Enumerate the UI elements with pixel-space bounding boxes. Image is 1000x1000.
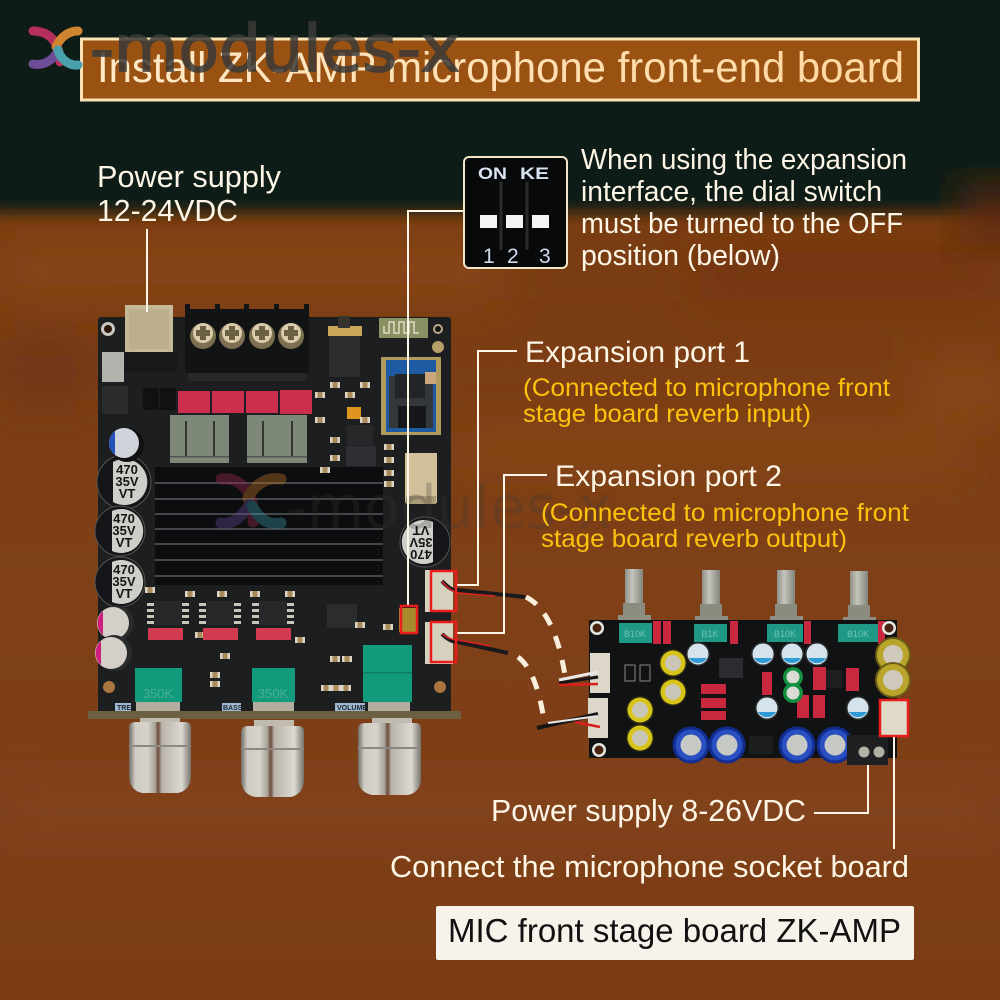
power supply 8-26VDC label: Power supply 8-26VDC (491, 793, 806, 828)
mounting holes (103, 681, 446, 693)
small blue capacitor (109, 428, 144, 462)
capacitor 470 35V bottom (95, 557, 145, 607)
title banner: Install ZK-AMP microphone front-end board (97, 44, 904, 92)
microphone front stage board: B10K (847, 629, 869, 639)
microphone front stage board: B1K (701, 629, 719, 639)
expansion port 2 label: Expansion port 2 (555, 460, 782, 493)
microphone front stage board: B10K (774, 629, 796, 639)
screw terminal (847, 735, 888, 765)
tone potentiometers: 350K (143, 686, 174, 701)
power supply label: Power supply (97, 159, 281, 194)
speaker terminal block (185, 304, 309, 381)
caption box: MIC front stage board ZK-AMP (448, 912, 901, 949)
small red capacitors (148, 628, 291, 640)
microphone socket label: Connect the microphone socket board (390, 849, 909, 884)
expansion port 2 label: (Connected to microphone front (541, 499, 909, 527)
knob: volume (358, 718, 421, 795)
knob: bass (241, 720, 304, 797)
grey inductors (170, 415, 307, 463)
logo watermark (33, 31, 78, 65)
pointer line: dial switch (408, 211, 463, 606)
knob: treble (129, 718, 191, 793)
pointer line: power supply 8-26VDC (814, 765, 868, 813)
dial switch inset: 3 (539, 245, 551, 268)
relay (405, 453, 437, 504)
microphone front stage board (537, 569, 911, 765)
pcb (589, 620, 897, 758)
dial switch inset: ON (478, 164, 507, 183)
pointer line: expansion port 2 (457, 475, 547, 633)
capacitor 470 35V middle (95, 506, 145, 556)
dc power jack (102, 305, 177, 414)
board silk labels: VOLUME (337, 705, 367, 712)
capacitor 470 35V top (97, 455, 151, 509)
pot bodies (619, 623, 878, 643)
microphone front stage board: B10K (624, 629, 646, 639)
dial switch instruction: When using the expansion (581, 144, 907, 176)
expansion port 2 label (541, 460, 909, 553)
tone potentiometers (135, 645, 412, 712)
main amplifier board (88, 304, 461, 719)
face plate (88, 711, 461, 719)
capacitor 470 35V middle: VT (116, 535, 132, 550)
logo watermark on board (221, 479, 281, 523)
capacitor 470 35V top: VT (119, 486, 135, 501)
capacitors (626, 637, 911, 764)
dial switch instruction: position (below) (581, 240, 780, 272)
heat sink (155, 467, 383, 585)
capacitor 470 35V top: 35V (115, 474, 139, 489)
expansion port 1 label (523, 336, 890, 428)
pointer line: expansion port 1 (457, 351, 517, 585)
tone potentiometers: 350K (258, 686, 289, 701)
board silk labels (115, 703, 367, 712)
capacitor 470 35V bottom: VT (116, 586, 132, 601)
dial switch instruction: interface, the dial switch (581, 176, 882, 208)
white input connectors and wires (537, 653, 610, 738)
red capacitors (178, 390, 312, 414)
pcb (98, 317, 451, 713)
capacitor 470 35V rotated: VT (413, 523, 429, 538)
watermark text: -modules-x (90, 13, 460, 87)
expansion port 1 label: (Connected to microphone front (523, 374, 890, 402)
expansion port 1 label: Expansion port 1 (525, 336, 750, 369)
pink capacitors (95, 605, 134, 671)
capacitor 470 35V rotated: 470 (410, 547, 432, 562)
expansion port 1 label: stage board reverb input) (523, 400, 811, 428)
watermark text on board: -modules-x (286, 473, 612, 543)
board silk labels: TRE (117, 705, 131, 712)
capacitor 470 35V rotated: 35V (409, 535, 433, 550)
dial switch instruction: must be turned to the OFF (581, 208, 903, 240)
power supply label (97, 159, 281, 228)
expansion port 2 label: stage board reverb output) (541, 525, 847, 553)
board connectors with wires (399, 570, 525, 664)
dashed connection arrows (518, 597, 566, 728)
power supply label: 12-24VDC (97, 193, 238, 228)
dial switch inset: KE (520, 164, 549, 183)
caption box (436, 906, 914, 960)
capacitor 470 35V middle: 470 (113, 511, 135, 526)
bluetooth module (381, 357, 441, 435)
capacitor 470 35V middle: 35V (112, 523, 136, 538)
bluetooth antenna (101, 318, 444, 353)
capacitor 470 35V rotated (400, 517, 450, 567)
dial switch inset (464, 157, 567, 268)
red highlight boxes (401, 571, 456, 662)
amplifier chips and parts (145, 382, 394, 691)
capacitor 470 35V bottom: 35V (112, 574, 136, 589)
dial switch inset: 1 (483, 245, 495, 268)
red film caps (653, 621, 885, 720)
capacitor 470 35V bottom: 470 (113, 562, 135, 577)
dial switch instruction (581, 144, 907, 272)
capacitor 470 35V top: 470 (116, 462, 138, 477)
pointer line: microphone socket (893, 737, 895, 849)
chips and holes (590, 621, 896, 757)
dial switch inset: 2 (507, 245, 519, 268)
board silk labels: BASS (223, 705, 243, 712)
pointer line: power supply (146, 229, 148, 312)
microphone socket connector (880, 700, 908, 736)
audio jack (328, 316, 362, 377)
potentiometer shafts (618, 569, 876, 644)
